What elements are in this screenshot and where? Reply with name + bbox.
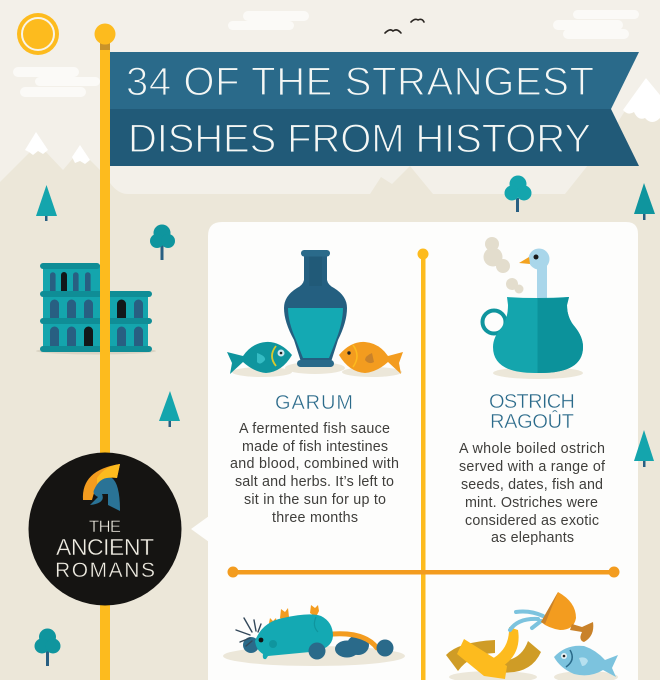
blue fish	[554, 646, 618, 677]
text block: ostrich description: considered as exotic	[465, 513, 599, 529]
goblet	[541, 592, 593, 642]
text block: ostrich description: mint. Ostriches were	[465, 495, 598, 511]
text block: ostrich description: A whole boiled ostrich	[459, 441, 605, 457]
ostrich head	[519, 248, 550, 300]
heading: ostrich ragout: OSTRICH	[489, 391, 575, 413]
liquid	[510, 612, 543, 630]
icon: ostrich pot	[482, 237, 583, 379]
text block: garum description	[230, 421, 399, 526]
text block: ostrich description	[459, 441, 605, 546]
callout: the ancient romans badge	[28, 452, 182, 606]
steam	[484, 237, 524, 294]
icon: pine tree right	[634, 183, 655, 220]
title text: DISHES FROM HISTORY	[128, 117, 591, 161]
badge text: ANCIENT	[56, 534, 154, 560]
text block: garum description: A fermented fish sauce	[239, 421, 390, 437]
pot body	[493, 297, 583, 373]
text block: ostrich description: as elephants	[491, 530, 574, 546]
text block: garum description: salt and herbs. It’s left to	[235, 474, 394, 490]
text block: garum description: three months	[272, 510, 358, 526]
icon: round tree bottom left	[34, 628, 60, 666]
title text: 34 OF THE STRANGEST	[126, 60, 594, 104]
icon: goblet, bread and fish	[446, 592, 618, 680]
title text	[126, 60, 594, 161]
whiskers	[236, 618, 261, 646]
text block: ostrich description: served with a range of	[459, 459, 605, 475]
icon: pine tree middle	[159, 391, 180, 427]
heading: ostrich ragout	[489, 391, 575, 433]
text block: garum description: sit in the sun for up to	[244, 492, 386, 508]
icon: dormouse dish	[223, 605, 405, 666]
paws	[268, 605, 319, 630]
badge text: THE	[89, 518, 121, 536]
heading: ostrich ragout: RAGOÛT	[490, 410, 574, 433]
icon: sun	[17, 13, 59, 55]
icon: pine tree left	[36, 185, 57, 221]
vase	[284, 250, 347, 367]
flag pole	[94, 24, 116, 680]
badge text: ROMANS	[55, 559, 155, 582]
title banner	[110, 52, 639, 166]
text block: garum description: and blood, combined with	[230, 456, 399, 472]
pot handle	[482, 310, 506, 334]
text block: ostrich description: seeds, dates, fish and	[461, 477, 603, 493]
icon: garum vase and fish	[227, 250, 403, 377]
icon: roman helmet	[83, 464, 120, 511]
panel: dishes card	[191, 222, 638, 680]
icon: round tree left	[150, 224, 175, 260]
orange fish	[339, 342, 403, 374]
grid dividers	[228, 248, 620, 680]
text block: garum description: made of fish intestines	[242, 439, 388, 455]
clouds	[13, 10, 639, 97]
icon: birds	[385, 19, 424, 33]
teal fish	[227, 342, 292, 374]
badge text	[55, 518, 155, 582]
icon: round tree top right	[504, 176, 532, 212]
icon: pine tree lower right	[634, 430, 654, 467]
heading: garum: GARUM	[275, 392, 353, 414]
bread	[446, 627, 541, 679]
icon: colosseum	[36, 263, 156, 354]
